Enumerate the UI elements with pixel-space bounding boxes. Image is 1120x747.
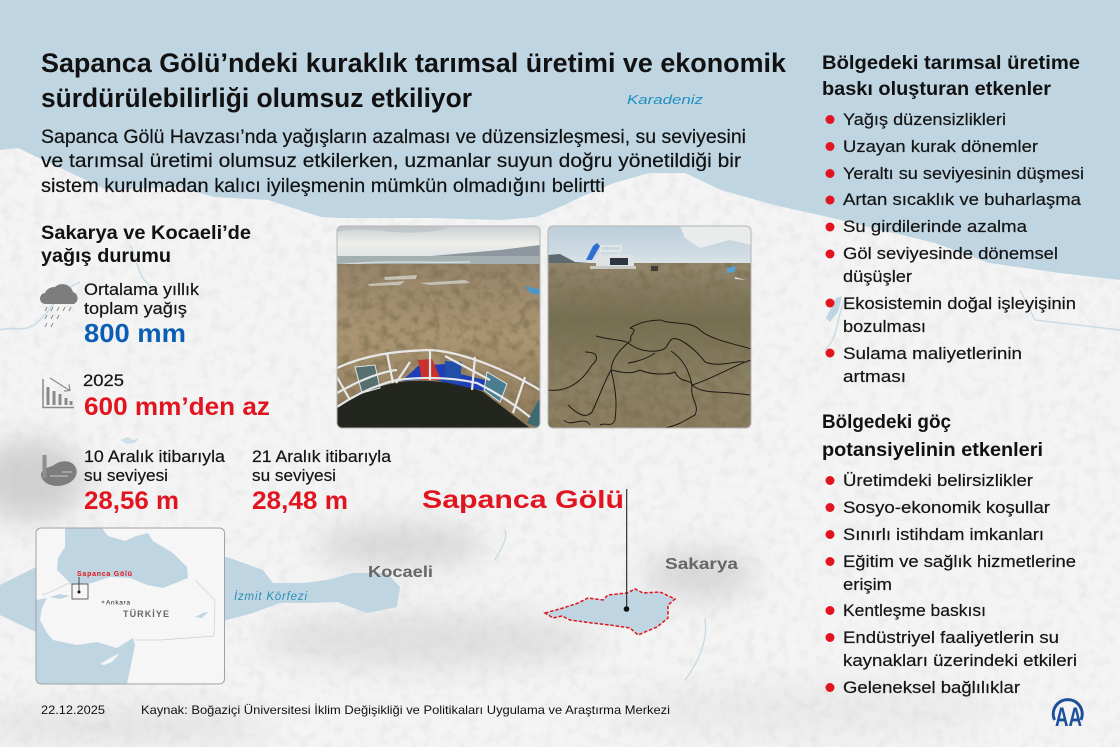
list: pressure factors: Sulama maliyetlerinin <box>843 344 1022 363</box>
stat: average annual rainfall: Ortalama yıllık <box>84 280 200 299</box>
list: migration factors: Kentleşme baskısı <box>843 601 986 620</box>
list: pressure factors: artması <box>843 367 906 386</box>
footer: source: Kaynak: Boğaziçi Üniversitesi İklim Değişikliği ve Politikaları Uygulama ve Araştırma Merkezi <box>141 703 670 717</box>
stat: average annual rainfall: 800 mm <box>84 318 186 348</box>
list: migration factors: Eğitim ve sağlık hizmetlerine <box>843 552 1076 571</box>
lake outline: Sapanca <box>545 589 675 635</box>
title: Sapanca Gölü’ndeki kuraklık tarımsal üretimi ve ekonomik <box>41 48 787 78</box>
label: Kocaeli: Kocaeli <box>368 564 433 581</box>
callout: Sapanca Gölü: Sapanca Gölü <box>422 486 624 514</box>
stat: 2025 rainfall: 600 mm’den az <box>84 393 270 421</box>
list: pressure factors: düşüşler <box>843 267 912 286</box>
list: migration factors: Endüstriyel faaliyetlerin su <box>843 628 1059 647</box>
list: pressure factors: Su girdilerinde azalma <box>843 217 1028 236</box>
inset label: Türkiye: TÜRKİYE <box>123 609 169 619</box>
label: Sakarya: Sakarya <box>665 556 738 573</box>
icon: lake level gauge <box>41 455 77 486</box>
inset label: Sapanca Gölü: Sapanca Gölü <box>77 571 132 578</box>
heading: pressure factors <box>822 52 1080 100</box>
heading: rainfall status: yağış durumu <box>41 245 171 267</box>
logo: Anadolu Agency <box>1053 700 1082 732</box>
panel: agricultural pressure factors <box>822 52 1084 386</box>
intro paragraph: sistem kurulmadan kalıcı iyileşmenin mümkün olmadığını belirtti <box>41 176 605 197</box>
intro paragraph: ve tarımsal üretimi olumsuz etkilerken, uzmanlar suyun doğru yönetildiği bir <box>41 151 742 172</box>
callout: Sapanca Gölü <box>422 486 629 612</box>
list: pressure factors: Ekosistemin doğal işleyişinin <box>843 294 1076 313</box>
icon: rain cloud <box>40 284 78 327</box>
label: Karadeniz: Karadeniz <box>627 92 704 107</box>
intro paragraph <box>41 127 746 197</box>
panel: migration potential factors <box>822 411 1077 697</box>
list: pressure factors <box>826 110 1084 386</box>
list: pressure factors: Yeraltı su seviyesinin düşmesi <box>843 164 1084 183</box>
stat: average annual rainfall <box>84 280 200 348</box>
stat: water level 21 December <box>252 447 392 515</box>
heading: migration factors <box>822 411 1043 461</box>
inset label: Ankara: Ankara <box>106 600 130 606</box>
stat: water level 21 December: 28,48 m <box>252 487 348 515</box>
heading: pressure factors: baskı oluşturan etkenler <box>822 78 1051 100</box>
list: pressure factors: Göl seviyesinde dönemsel <box>843 244 1058 263</box>
list: migration factors: kaynakları üzerindeki etkileri <box>843 651 1077 670</box>
heading: rainfall status <box>41 222 251 267</box>
list: pressure factors: bozulması <box>843 317 926 336</box>
intro paragraph: Sapanca Gölü Havzası’nda yağışların azalması ve düzensizleşmesi, su seviyesini <box>41 127 746 148</box>
label: Izmit Gulf: İzmit Körfezi <box>234 591 307 603</box>
list: migration factors: Sosyo-ekonomik koşullar <box>843 498 1050 517</box>
stat: water level 21 December: su seviyesi <box>252 466 336 485</box>
heading: rainfall status: Sakarya ve Kocaeli’de <box>41 222 251 244</box>
stat: 2025 rainfall: 2025 <box>83 371 124 390</box>
list: migration factors <box>826 471 1077 697</box>
heading: migration factors: potansiyelinin etkenleri <box>822 439 1043 461</box>
stat: water level 10 December: 28,56 m <box>84 487 179 515</box>
logo: Anadolu Agency: AA <box>1055 702 1082 732</box>
list: migration factors: Üretimdeki belirsizlikler <box>843 471 1033 490</box>
title <box>41 48 787 113</box>
stat: water level 10 December: su seviyesi <box>84 466 168 485</box>
footer: date: 22.12.2025 <box>41 703 105 717</box>
list: pressure factors: Uzayan kurak dönemler <box>843 137 1038 156</box>
inset locator map: Türkiye <box>36 528 225 684</box>
list: migration factors: erişim <box>843 575 892 594</box>
heading: pressure factors: Bölgedeki tarımsal üretime <box>822 52 1080 74</box>
map: Izmit Gulf water <box>0 557 400 632</box>
list: pressure factors: Yağış düzensizlikleri <box>843 110 1006 129</box>
stat: water level 10 December <box>84 447 226 515</box>
stat: average annual rainfall: toplam yağış <box>84 299 187 318</box>
stat: water level 10 December: 10 Aralık itibarıyla <box>84 447 226 466</box>
photo: dry lake bed seen from a boat <box>337 226 540 428</box>
heading: migration factors: Bölgedeki göç <box>822 411 951 433</box>
icon: falling bar chart <box>43 378 74 408</box>
stat: 2025 rainfall <box>83 371 270 421</box>
title: sürdürülebilirliği olumsuz etkiliyor <box>41 83 472 113</box>
list: migration factors: Geleneksel bağlılıklar <box>843 678 1020 697</box>
list: migration factors: Sınırlı istihdam imkanları <box>843 525 1044 544</box>
photo: cracked dry lake bed <box>548 226 751 428</box>
stat: water level 21 December: 21 Aralık itibarıyla <box>252 447 392 466</box>
list: pressure factors: Artan sıcaklık ve buharlaşma <box>843 190 1082 209</box>
